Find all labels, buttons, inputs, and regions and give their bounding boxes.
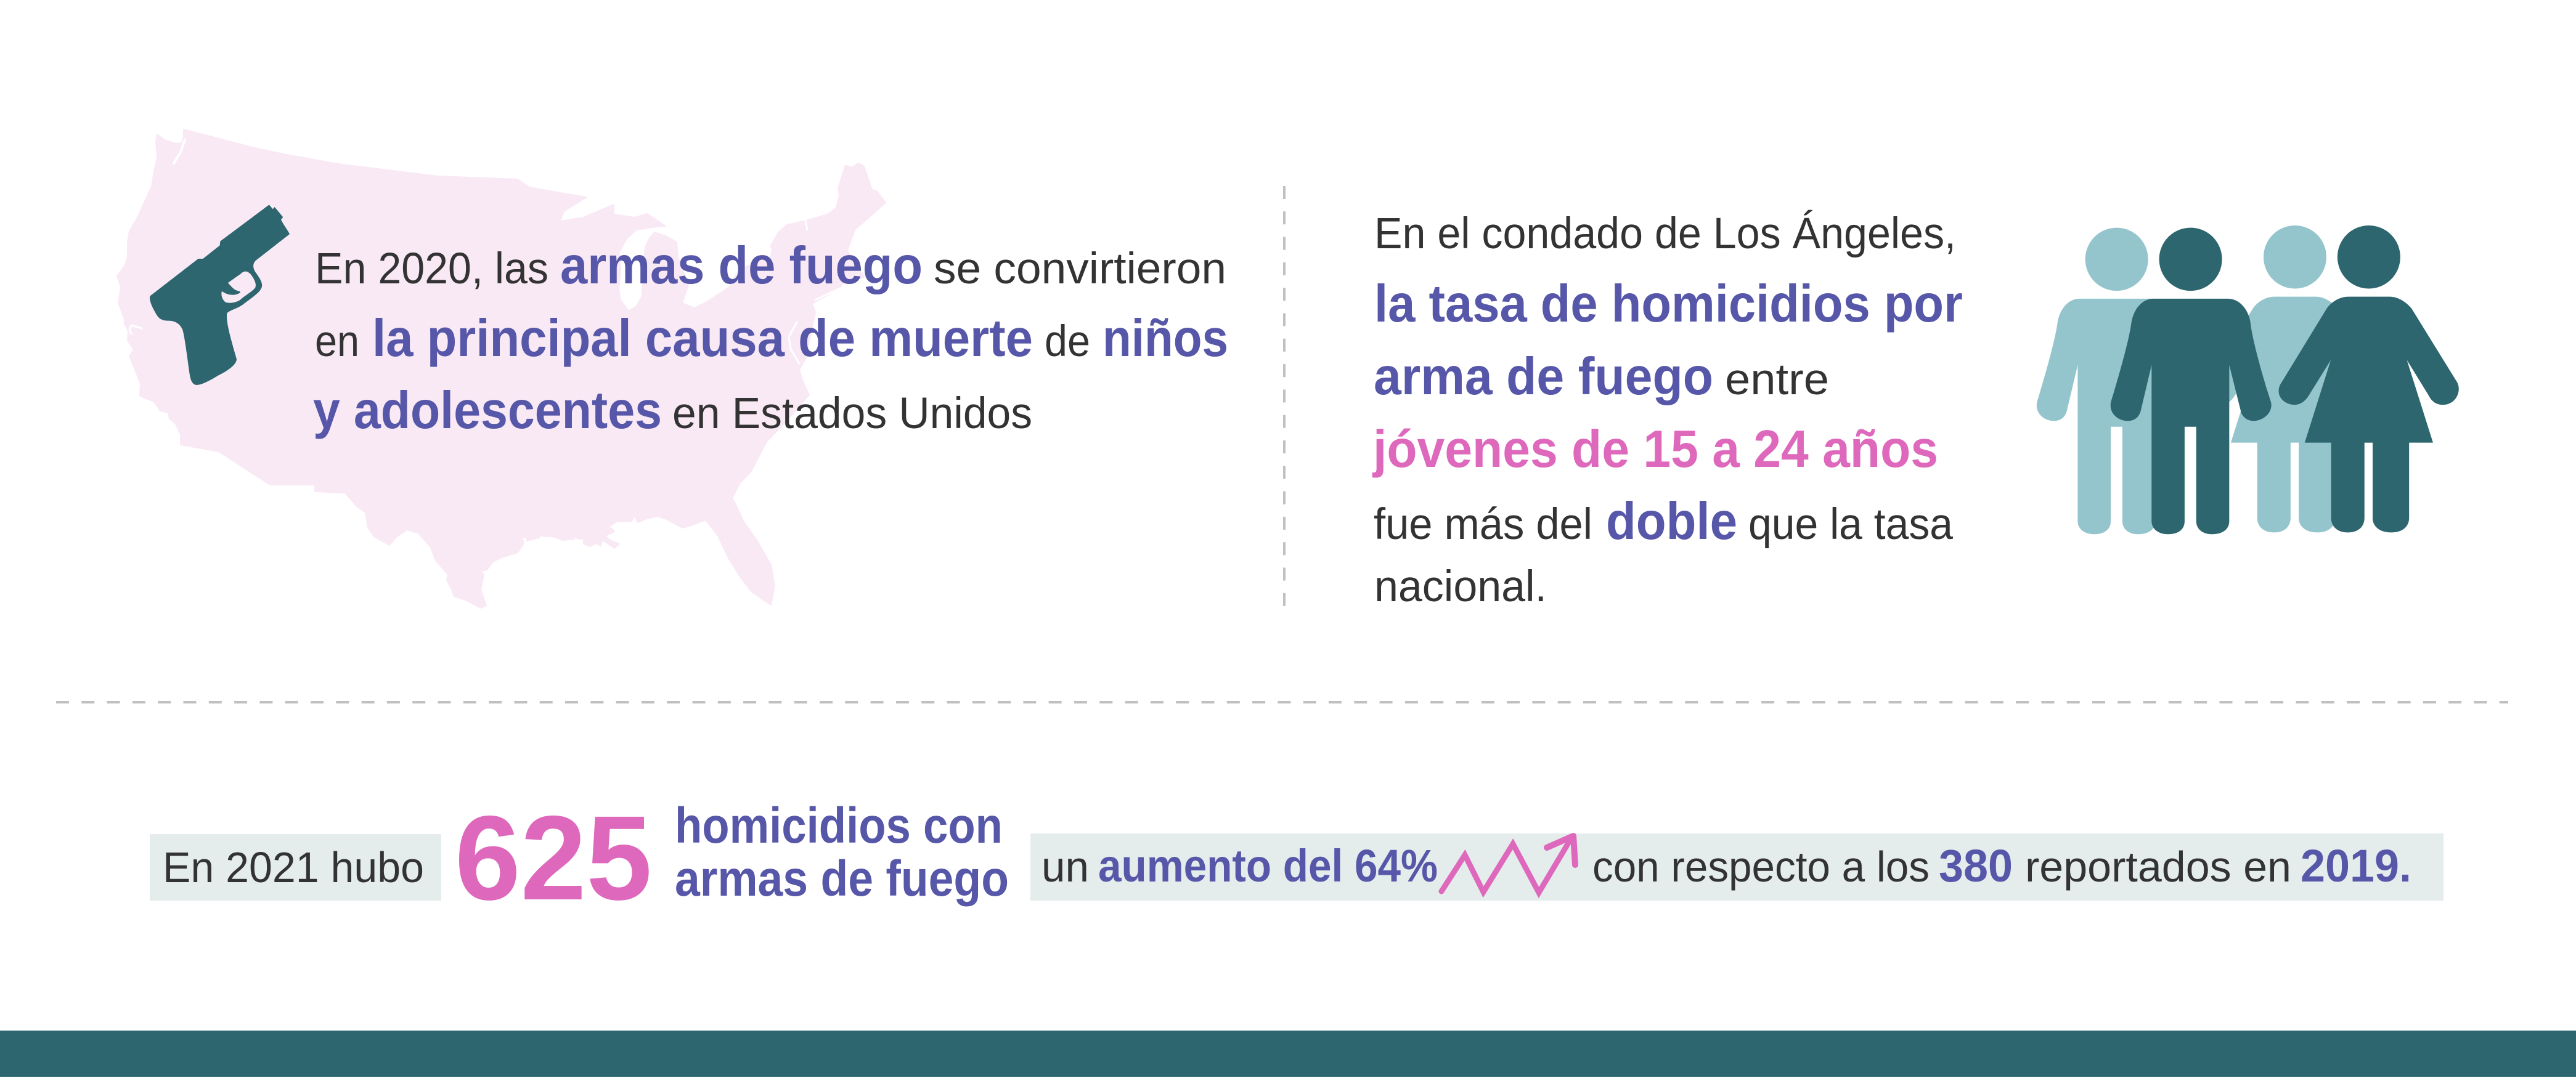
- map of the United States: [117, 129, 886, 608]
- label box: En 2021 hubo: [150, 834, 441, 901]
- arrow: rising zigzag: [1441, 836, 1575, 893]
- text: national leading cause of death: la principal causa de muerte: [372, 309, 1033, 368]
- text: national leading cause of death: de: [1045, 317, 1090, 366]
- text: Los Angeles youth homicide rate: En el condado de Los Ángeles,: [1374, 209, 1956, 258]
- comparison strip: 380: [1939, 840, 2013, 891]
- text: Los Angeles youth homicide rate: la tasa de homicidios por: [1374, 275, 1963, 333]
- text: national leading cause of death: en Estados Unidos: [672, 389, 1032, 438]
- text: Los Angeles youth homicide rate: doble: [1606, 492, 1737, 551]
- text: national leading cause of death: armas de fuego: [560, 237, 923, 295]
- text: Los Angeles youth homicide rate: que la tasa: [1748, 500, 1953, 549]
- text: national leading cause of death: y adolescentes: [313, 381, 662, 440]
- text: homicidios con armas de fuego: armas de fuego: [675, 851, 1009, 907]
- panel: 2021 homicide statistic: [150, 791, 2444, 925]
- comparison strip: un: [1041, 843, 1089, 891]
- comparison strip: reportados en: [2025, 843, 2291, 891]
- icon: handgun: [150, 205, 290, 385]
- text: Los Angeles youth homicide rate: [1372, 209, 1963, 611]
- text: national leading cause of death: niños: [1103, 309, 1228, 368]
- text: national leading cause of death: En 2020, las: [315, 245, 548, 293]
- text: homicidios con armas de fuego: [675, 798, 1009, 907]
- text: national leading cause of death: [313, 237, 1228, 440]
- text: national leading cause of death: se convirtieron: [934, 245, 1226, 293]
- text: Los Angeles youth homicide rate: arma de fuego: [1374, 347, 1713, 406]
- panel: left national statistic: [117, 129, 1228, 608]
- comparison strip: [1030, 833, 2444, 901]
- comparison strip: 2019.: [2301, 840, 2411, 891]
- text: Los Angeles youth homicide rate: fue más del: [1374, 500, 1592, 549]
- text: Los Angeles youth homicide rate: jóvenes de 15 a 24 años: [1372, 420, 1938, 479]
- big number: 625: 625: [455, 791, 652, 925]
- icon: group of four young people: [2037, 225, 2459, 534]
- text: Los Angeles youth homicide rate: entre: [1725, 355, 1829, 404]
- footer bar: [0, 1031, 2576, 1077]
- text: national leading cause of death: en: [315, 317, 359, 366]
- label box: En 2021 hubo: En 2021 hubo: [163, 843, 424, 891]
- text: Los Angeles youth homicide rate: nacional.: [1374, 562, 1547, 611]
- panel: right Los Angeles statistic: [1372, 209, 2459, 611]
- comparison strip: aumento del 64%: [1098, 840, 1438, 891]
- text: homicidios con armas de fuego: homicidios con: [675, 798, 1003, 854]
- comparison strip: con respecto a los: [1592, 843, 1930, 891]
